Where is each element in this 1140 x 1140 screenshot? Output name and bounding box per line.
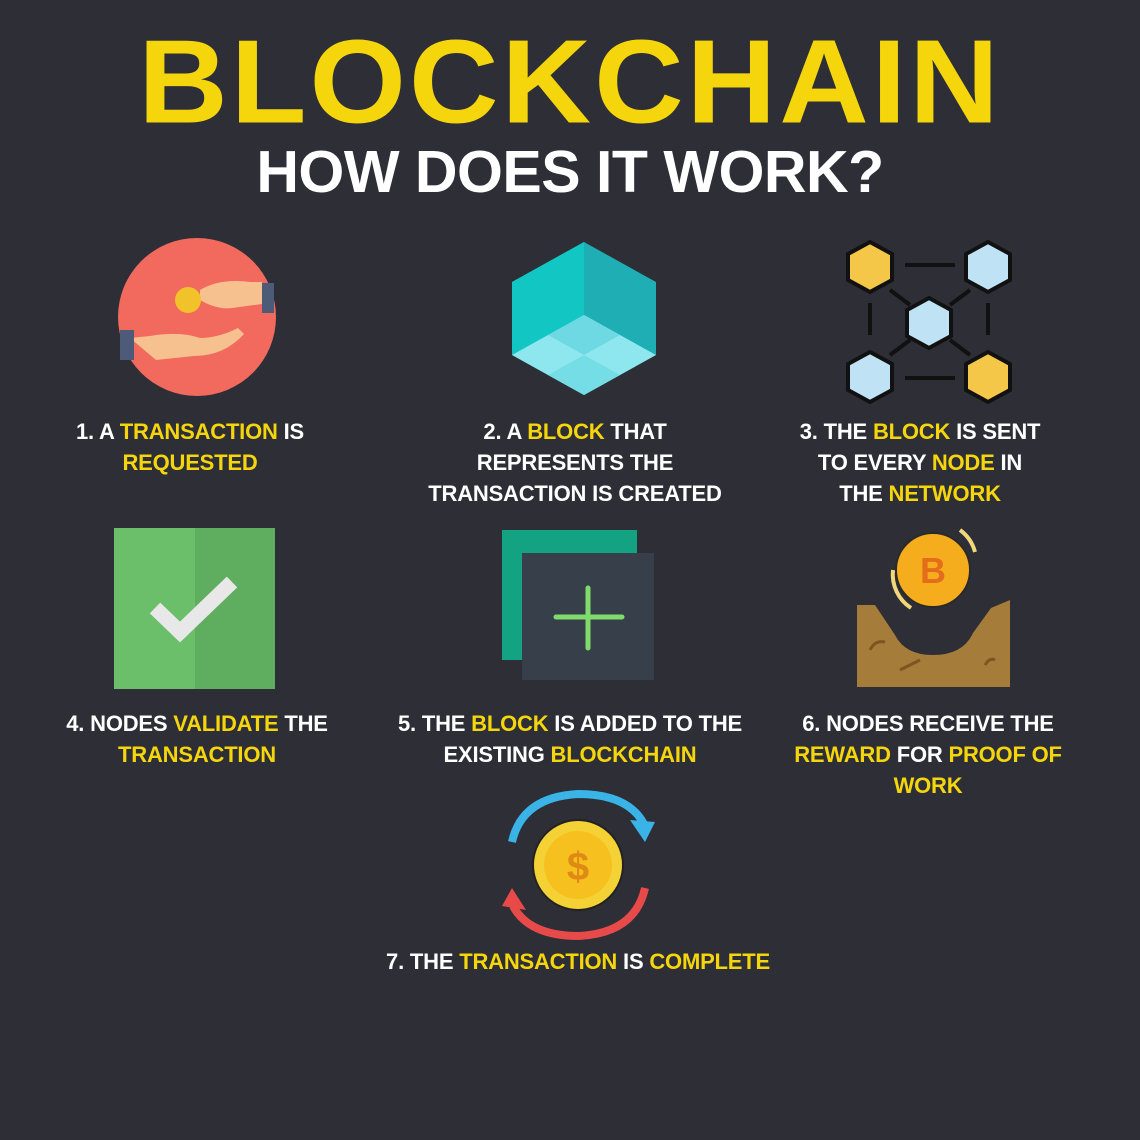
label 6: 6. NODES RECEIVE THE bbox=[802, 711, 1054, 736]
label 1 bbox=[76, 419, 304, 475]
icon: validate check bbox=[114, 528, 275, 689]
label 3: TO EVERY NODE IN bbox=[818, 450, 1022, 475]
icon: complete coin cycle: $ bbox=[567, 845, 589, 889]
label 1: 1. A TRANSACTION IS bbox=[76, 419, 304, 444]
label 2: TRANSACTION IS CREATED bbox=[428, 481, 722, 506]
icon: hands transaction bbox=[118, 238, 276, 396]
icon: mining reward bbox=[857, 530, 1010, 687]
label 6 bbox=[794, 711, 1062, 798]
label 5: 5. THE BLOCK IS ADDED TO THE bbox=[398, 711, 742, 736]
label 2 bbox=[428, 419, 722, 506]
icon: add block bbox=[502, 530, 654, 680]
label 5: EXISTING BLOCKCHAIN bbox=[444, 742, 696, 767]
icon: network of nodes bbox=[848, 242, 1010, 402]
icon: complete coin cycle bbox=[502, 794, 655, 936]
label 3: 3. THE BLOCK IS SENT bbox=[800, 419, 1040, 444]
label 4: 4. NODES VALIDATE THE bbox=[66, 711, 328, 736]
label 6: REWARD FOR PROOF OF bbox=[794, 742, 1062, 767]
label 4: TRANSACTION bbox=[118, 742, 276, 767]
label 6: WORK bbox=[894, 773, 962, 798]
label 3: THE NETWORK bbox=[839, 481, 1001, 506]
icon: cube block bbox=[512, 242, 656, 395]
subtitle: HOW DOES IT WORK? bbox=[256, 139, 884, 205]
label 2: 2. A BLOCK THAT bbox=[483, 419, 667, 444]
title: BLOCKCHAIN bbox=[138, 16, 1002, 148]
label 2: REPRESENTS THE bbox=[477, 450, 673, 475]
label 3 bbox=[800, 419, 1040, 506]
icon: mining reward: B bbox=[920, 550, 946, 591]
label 4 bbox=[66, 711, 328, 767]
label 1: REQUESTED bbox=[122, 450, 258, 475]
label 7: 7. THE TRANSACTION IS COMPLETE bbox=[386, 949, 770, 974]
label 5 bbox=[398, 711, 742, 767]
